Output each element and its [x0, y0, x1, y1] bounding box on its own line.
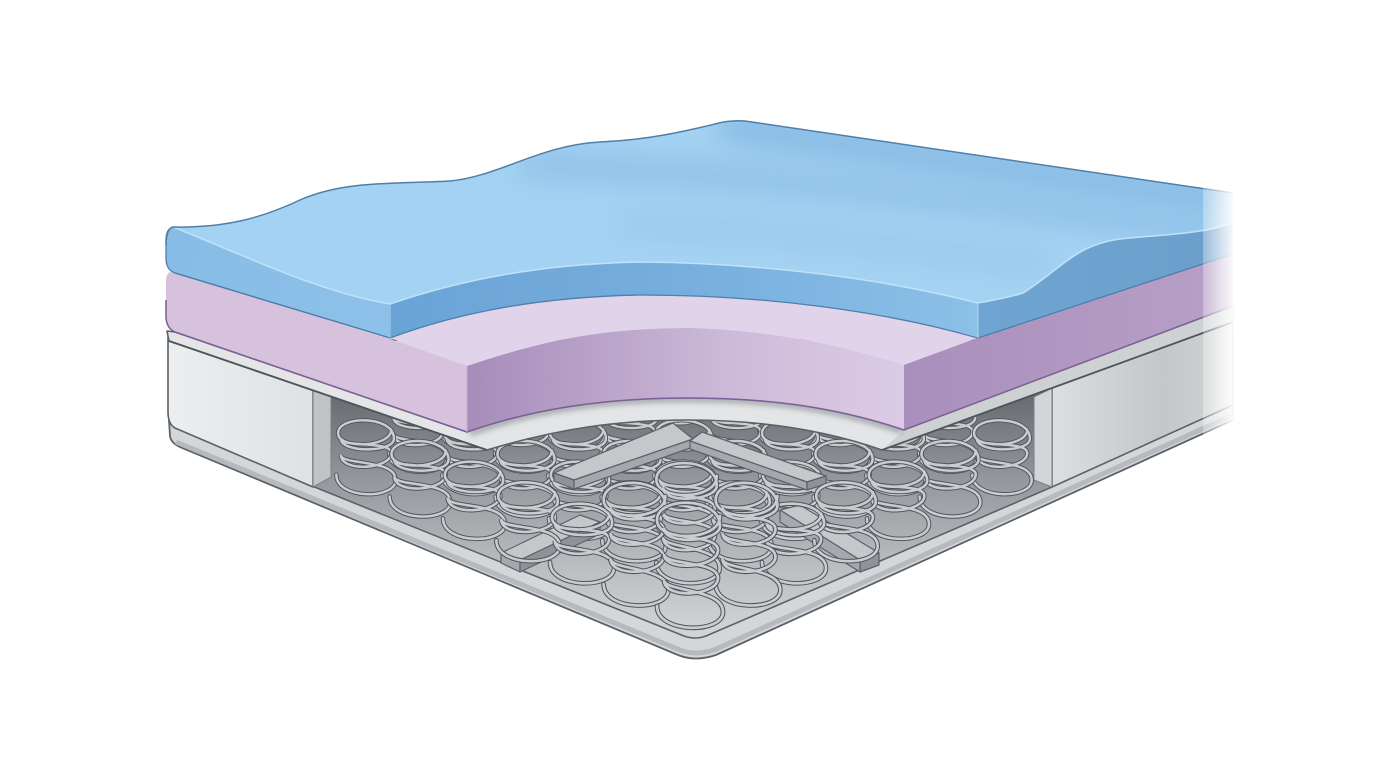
- spring floor: [312, 380, 1052, 638]
- base plate: [169, 340, 1233, 658]
- right edge block: [1034, 312, 1233, 487]
- bar: lower left: [501, 515, 600, 572]
- blue foam layer: [166, 121, 1233, 338]
- purple: left face: [166, 272, 467, 432]
- blue: right face: [978, 222, 1233, 338]
- support sheet: [167, 306, 1233, 450]
- blue: top surface: [173, 121, 1233, 304]
- purple foam layer: [166, 254, 1233, 432]
- rear springs: [336, 379, 1032, 539]
- illustration: layered mattress cutaway: [165, 120, 1234, 660]
- bar: upper right: [690, 432, 826, 490]
- right edge fade: [1203, 170, 1236, 440]
- left edge block: [168, 338, 331, 487]
- bar: upper left: [554, 423, 693, 489]
- cross bars: [501, 423, 879, 572]
- bar: lower right: [780, 505, 879, 572]
- purple: top surface: [390, 295, 980, 366]
- front springs: [496, 463, 878, 628]
- blue: curved inner face: [390, 262, 978, 338]
- blue: left face: [166, 227, 390, 338]
- purple: curved inner face: [467, 328, 904, 432]
- purple: right face: [904, 254, 1233, 430]
